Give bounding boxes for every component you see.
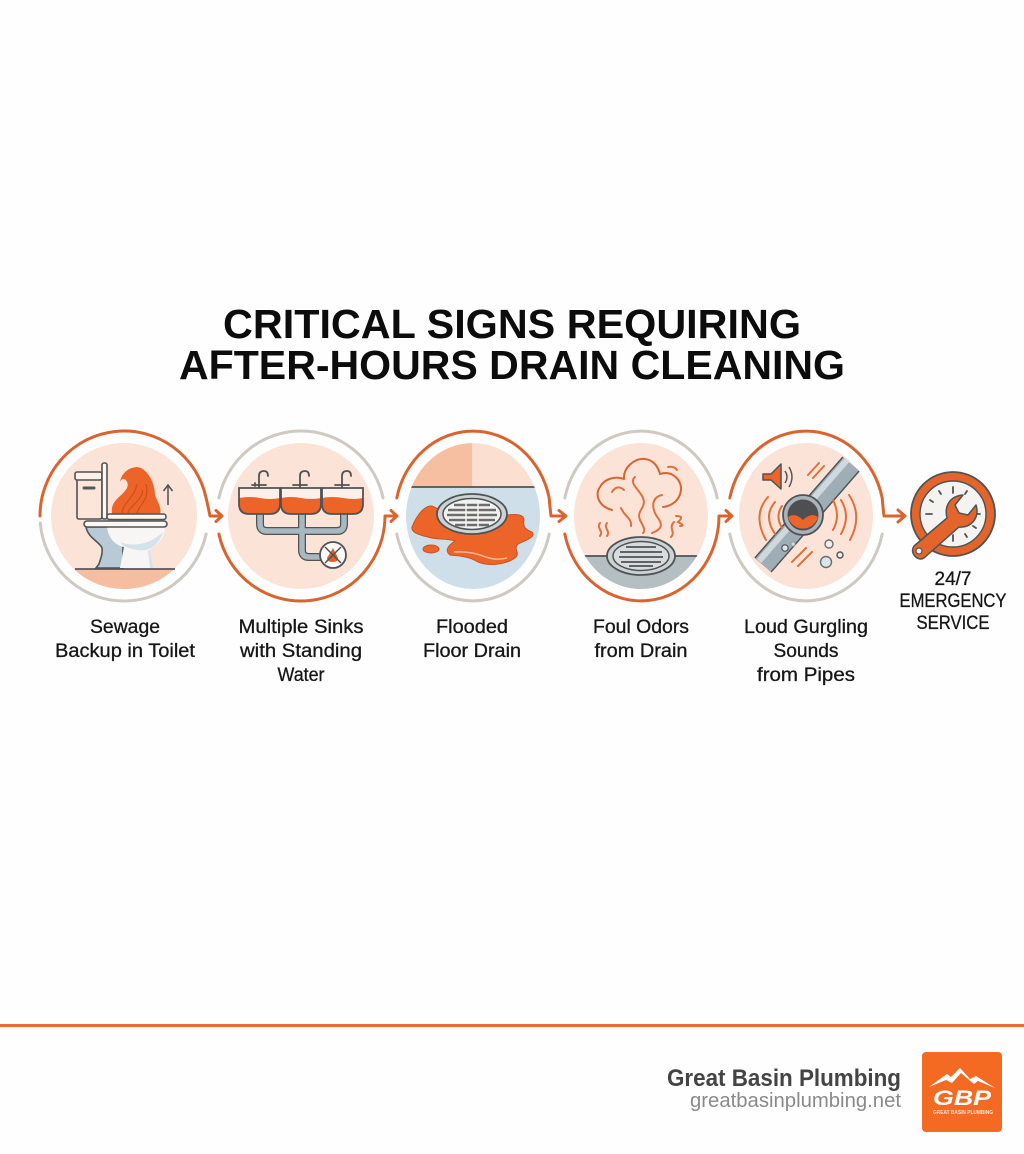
label: sewage backup: Backup in Toilet <box>55 641 196 662</box>
logo: GBP <box>933 1087 992 1110</box>
ring and arrow to step 2 <box>40 431 222 601</box>
label: flooded floor drain: Floor Drain <box>423 641 521 662</box>
ring and arrow to step 5 <box>565 431 732 601</box>
logo <box>922 1052 1002 1132</box>
label: 24/7 emergency service: SERVICE <box>916 613 990 634</box>
title: CRITICAL SIGNS REQUIRING <box>223 301 801 347</box>
label: foul odors <box>593 617 689 662</box>
icon: 24/7 clock with wrench <box>911 472 995 559</box>
ring and arrow to step 4 <box>397 431 566 601</box>
label: multiple sinks: Water <box>278 665 325 686</box>
icon: sinks and pipes <box>239 471 363 568</box>
label: 24/7 emergency service <box>900 569 1007 634</box>
label: loud gurgling: Sounds <box>774 641 838 662</box>
footer brand text <box>667 1065 901 1112</box>
label: multiple sinks: Multiple Sinks <box>238 617 364 638</box>
label: flooded floor drain: Flooded <box>436 617 508 638</box>
footer rule <box>0 1024 1024 1027</box>
panel: multiple sinks with standing water <box>219 431 397 601</box>
icon: toilet <box>74 462 175 589</box>
label: flooded floor drain <box>423 617 521 662</box>
label: sewage backup <box>55 617 196 662</box>
footer brand text: Great Basin Plumbing <box>667 1065 901 1092</box>
label: loud gurgling <box>744 617 868 686</box>
label: foul odors: from Drain <box>594 641 688 662</box>
title: AFTER-HOURS DRAIN CLEANING <box>179 342 845 388</box>
label: foul odors: Foul Odors <box>593 617 689 638</box>
icon: odor cloud over drain <box>574 443 708 589</box>
label: 24/7 emergency service: EMERGENCY <box>900 591 1007 612</box>
panel: loud gurgling sounds from pipes <box>730 431 905 601</box>
ring and arrow to service <box>730 431 905 601</box>
panel: flooded floor drain <box>397 431 566 601</box>
label: multiple sinks <box>238 617 364 686</box>
panel: sewage backup in toilet <box>40 431 222 601</box>
icon: gurgling pipe <box>759 460 856 568</box>
logo: GREAT BASIN PLUMBING <box>933 1110 993 1116</box>
title <box>179 301 845 388</box>
label: loud gurgling: from Pipes <box>757 665 855 686</box>
label: 24/7 emergency service: 24/7 <box>934 569 972 590</box>
label: multiple sinks: with Standing <box>239 641 362 662</box>
footer brand text: greatbasinplumbing.net <box>690 1090 901 1112</box>
icon: no-clog sign <box>320 542 346 568</box>
icon: speaker <box>763 464 792 489</box>
icon: flooded drain <box>406 443 540 589</box>
label: loud gurgling: Loud Gurgling <box>744 617 868 638</box>
panel: foul odors from drain <box>565 431 732 601</box>
ring and arrow to step 3 <box>219 431 397 601</box>
label: sewage backup: Sewage <box>90 617 160 638</box>
